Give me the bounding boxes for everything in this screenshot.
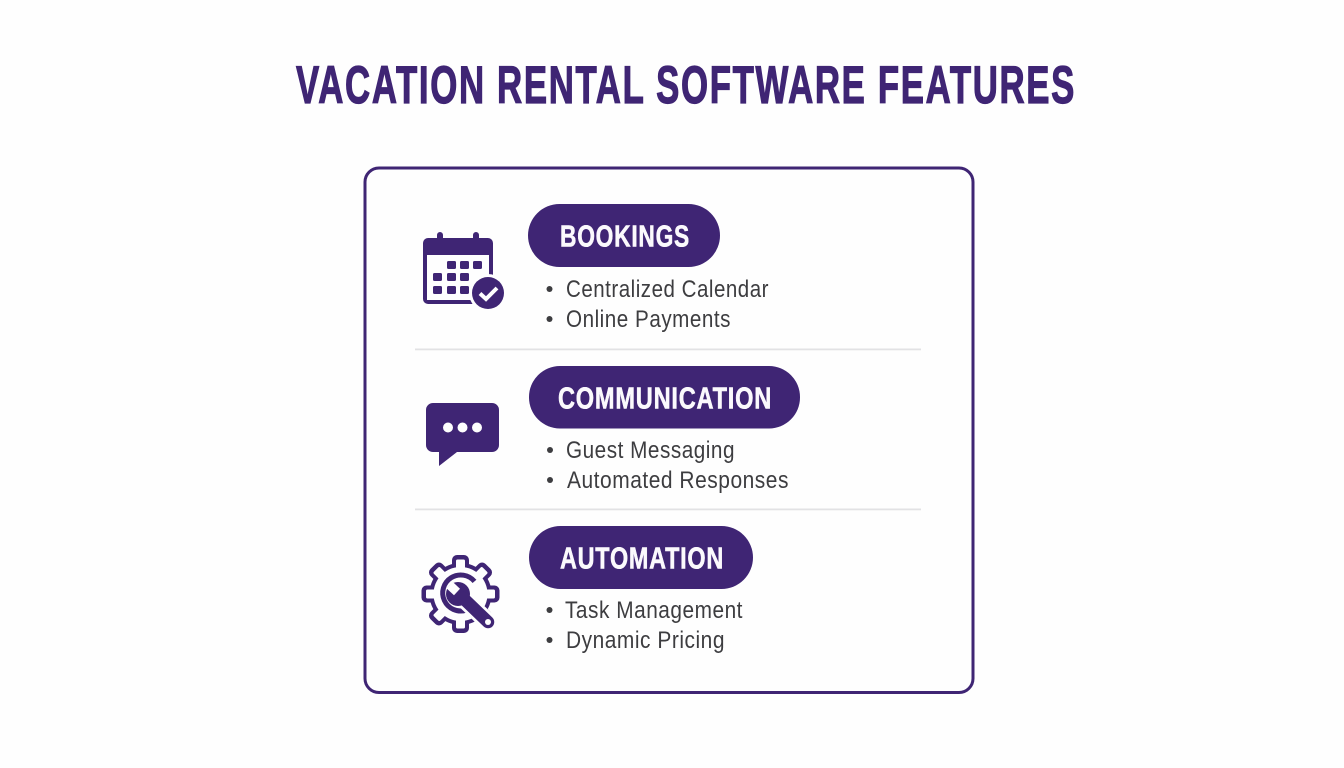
panel: features	[365, 168, 973, 692]
list: bookings items	[546, 276, 769, 333]
list: automation items: Dynamic Pricing	[566, 627, 725, 654]
heading pill: bookings	[528, 204, 720, 267]
list: bookings items: Centralized Calendar	[566, 276, 769, 303]
heading pill: communication: COMMUNICATION	[558, 380, 772, 416]
heading pill: automation: AUTOMATION	[560, 540, 724, 576]
icon: gear with wrench	[422, 556, 498, 632]
heading pill: automation	[529, 526, 753, 589]
heading pill: bookings: BOOKINGS	[560, 218, 690, 254]
section: bookings	[423, 204, 769, 333]
section: communication	[426, 366, 800, 494]
icon: chat bubble	[426, 403, 499, 466]
section: automation	[422, 526, 753, 654]
heading pill: communication	[529, 366, 800, 428]
icon: calendar with check badge	[423, 232, 507, 312]
list: bookings items: Online Payments	[566, 306, 731, 333]
list: communication items: Guest Messaging	[566, 437, 735, 464]
list: automation items	[546, 597, 743, 654]
list: communication items	[547, 437, 789, 494]
list: automation items: Task Management	[565, 597, 743, 624]
list: communication items: Automated Responses	[567, 467, 789, 494]
